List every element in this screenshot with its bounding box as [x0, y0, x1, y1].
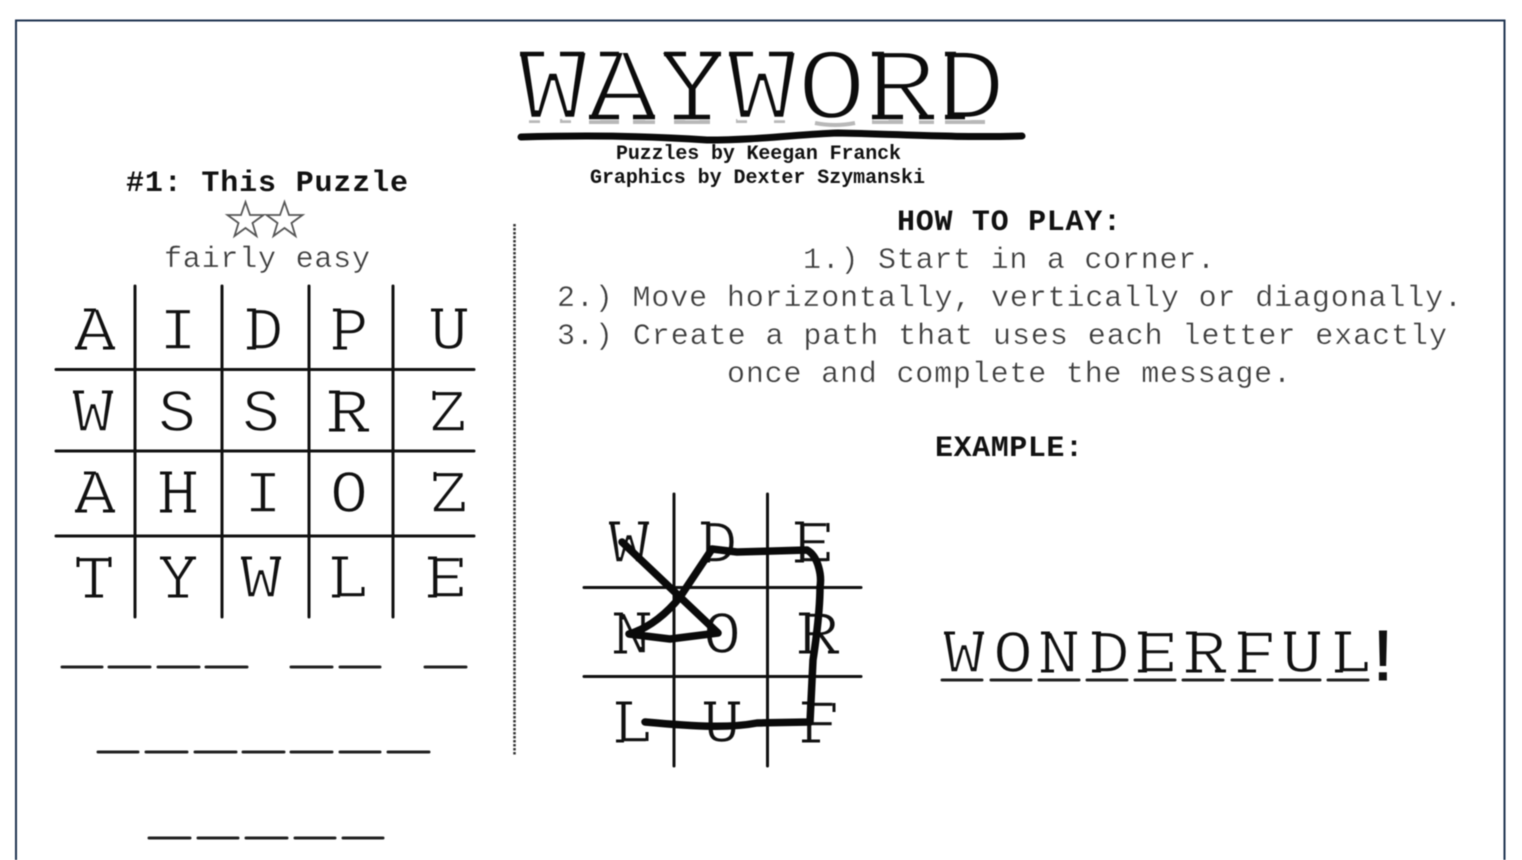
example letters: N: [614, 604, 650, 672]
puzzle letters: W: [73, 382, 113, 450]
instructions: 2.) Move horizontally, vertically or diagonally.: [557, 282, 1462, 316]
instructions: [557, 244, 1462, 392]
panel: puzzle 1: [56, 167, 474, 838]
puzzle letters: R: [329, 382, 369, 450]
puzzle letters: I: [244, 463, 282, 531]
hand-drawn exclamation mark: !: [1361, 619, 1405, 703]
solved answer: WONDERFUL!: [942, 619, 1405, 703]
example letters: O: [703, 604, 741, 672]
puzzle letters: A: [75, 300, 115, 368]
puzzle letters: Z: [431, 463, 467, 531]
instructions: 1.) Start in a corner.: [803, 244, 1215, 278]
example letters: U: [704, 693, 740, 761]
title underline: [521, 133, 1022, 140]
example puzzle: [584, 494, 861, 766]
example letters: E: [794, 513, 832, 581]
puzzle letters: Y: [160, 548, 196, 616]
puzzle letters: O: [330, 463, 368, 531]
example letters: [609, 513, 839, 761]
instructions: 3.) Create a path that uses each letter exactly: [557, 320, 1447, 354]
example letter serifs: [609, 523, 839, 741]
puzzle letters: D: [246, 300, 284, 368]
puzzle letters: E: [428, 548, 464, 616]
example letters: F: [800, 693, 838, 761]
puzzle letters: S: [242, 382, 280, 450]
answer blanks: [942, 678, 1368, 682]
puzzle letters: I: [159, 300, 197, 368]
credits: [590, 143, 925, 190]
credits: Puzzles by Keegan Franck: [616, 143, 901, 166]
example letters: R: [799, 604, 839, 672]
puzzle letters: Z: [430, 382, 466, 450]
answer letter serifs: [944, 633, 1366, 671]
icon: two difficulty stars: [228, 202, 302, 236]
panel: how to play: [557, 206, 1462, 466]
example grid lines: [584, 494, 861, 766]
difficulty label: fairly easy: [164, 243, 370, 277]
how to play heading: HOW TO PLAY:: [897, 206, 1121, 240]
puzzle letters: A: [75, 463, 115, 531]
title: WAYWORD: WAYWORD: [518, 34, 1006, 150]
puzzle letters: U: [430, 300, 468, 368]
puzzle letters: [73, 300, 468, 616]
puzzle letters: P: [332, 300, 368, 368]
puzzle letters: L: [330, 548, 366, 616]
puzzle grid lines: [56, 286, 474, 617]
example letters: D: [700, 513, 738, 581]
hand-drawn solution path: [622, 542, 820, 726]
example heading: EXAMPLE:: [935, 432, 1083, 466]
puzzle letter serifs: [73, 310, 467, 596]
credits: Graphics by Dexter Szymanski: [590, 167, 925, 190]
puzzle letters: S: [158, 382, 196, 450]
puzzle heading: #1: This Puzzle: [126, 167, 408, 201]
puzzle letters: W: [241, 548, 281, 616]
example letters: W: [609, 513, 649, 581]
answer letters: WONDERFUL: [944, 623, 1371, 691]
answer blanks: [62, 667, 466, 838]
puzzle letters: H: [160, 463, 196, 531]
puzzle letters: T: [76, 548, 112, 616]
example letters: L: [614, 693, 650, 761]
instructions: once and complete the message.: [727, 358, 1291, 392]
